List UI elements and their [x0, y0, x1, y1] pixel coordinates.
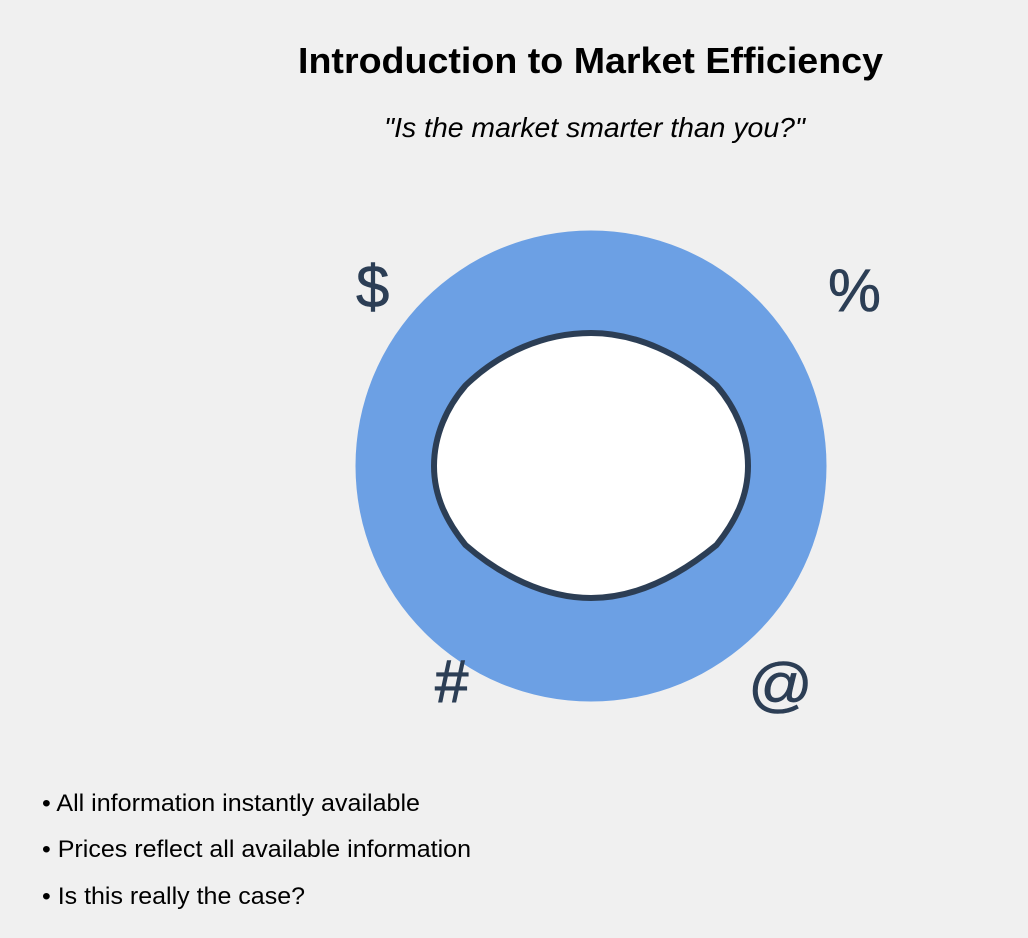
icon: hash symbol: #: [435, 648, 469, 715]
bullet: prices: • Prices reflect all available information: [42, 836, 471, 863]
icon: percent symbol: %: [828, 257, 881, 324]
icon: at symbol: @: [748, 651, 813, 718]
icon: dollar symbol: $: [356, 253, 389, 320]
title: Introduction to Market Efficiency: [298, 40, 883, 81]
subtitle: "Is the market smarter than you?": [384, 112, 806, 143]
blue market circle with inner shape: [356, 230, 826, 702]
bullet: question: • Is this really the case?: [42, 883, 305, 910]
bullet: information: • All information instantly available: [42, 790, 420, 817]
icon: central white brain-like shape: [434, 333, 748, 598]
bullet list: [42, 790, 471, 910]
